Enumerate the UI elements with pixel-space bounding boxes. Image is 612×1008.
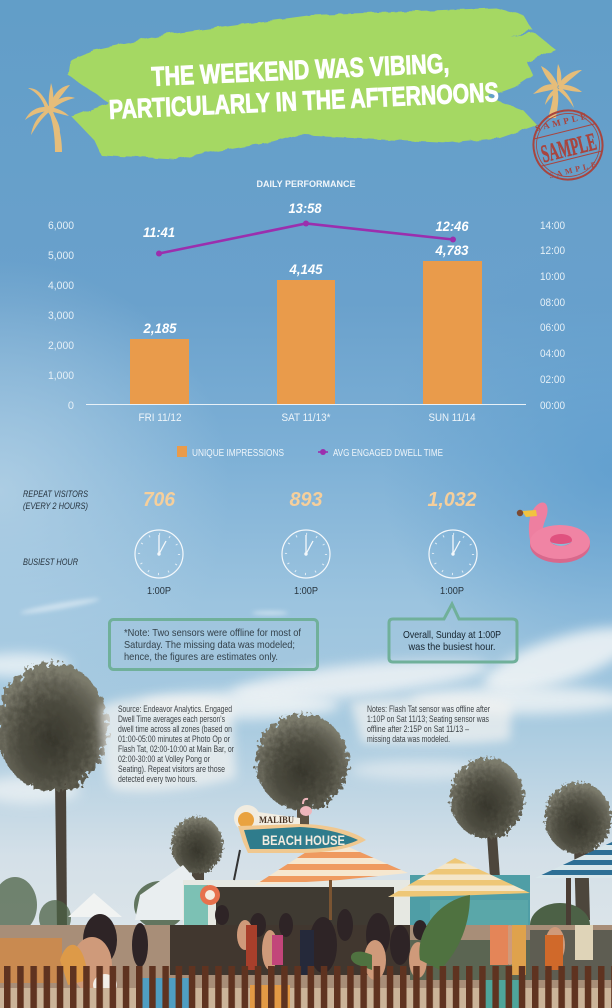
title: THE WEEKEND WAS VIBING, [151,48,450,92]
palm tree small [171,816,223,885]
row labels: REPEAT VISITORS [23,489,89,500]
right axis labels: 04:00 [540,348,565,360]
blue striped umbrella [535,842,612,928]
right axis labels: 12:00 [540,245,565,257]
source text: dwell time across all zones (based on [118,724,232,734]
sign: Malibu Beach House: MALIBU [259,816,294,826]
line: avg engaged dwell time [156,220,456,256]
right axis labels: 06:00 [540,322,565,334]
notes text: Notes: Flash Tat sensor was offline after [367,704,490,714]
clock time labels [147,585,464,597]
photo: beach house scene [0,663,612,1008]
callout: busiest hour: was the busiest hour. [408,641,496,653]
repeat visitor figures: 1,032 [428,489,476,511]
category labels [138,412,476,424]
notes text: offline after 2:15P on Sat 11/13 – [367,724,470,734]
bars: unique impressions [130,261,482,404]
right axis labels: 00:00 [540,400,565,412]
source text: Seating). Repeat visitors are those [118,764,225,774]
icon: palm tree left [25,83,75,152]
title brush stroke [68,8,556,159]
left axis labels: 3,000 [48,310,74,322]
source text: 01:00-05:00 minutes at Photo Op or [118,734,230,744]
category labels: SUN 11/14 [428,412,476,424]
left axis labels: 2,000 [48,340,74,352]
left axis labels: 5,000 [48,250,74,262]
note box: hence, the figures are estimates only. [124,651,278,663]
right axis labels: 14:00 [540,220,565,232]
data labels: 11:41 [143,224,175,240]
clock time labels: 1:00P [294,585,318,597]
callout: busiest hour [389,604,517,662]
row labels [23,489,89,568]
callout: busiest hour: Overall, Sunday at 1:00P [403,629,501,641]
notes text [367,704,490,744]
notes text: missing data was modeled. [367,734,450,744]
note box: *Note: Two sensors were offline for most of [124,627,301,639]
crowd [0,895,612,1008]
palm tree right [450,758,524,878]
repeat visitor figures [143,489,476,511]
icon: palm tree right [533,64,582,118]
background foliage [0,877,590,947]
row labels: (EVERY 2 HOURS) [23,501,88,512]
notes background blob [350,697,512,744]
data labels: 4,783 [435,242,469,258]
data labels: 2,185 [143,320,177,336]
category labels: SAT 11/13* [282,412,331,424]
left axis labels [48,220,74,412]
white tents [68,865,204,920]
orange striped umbrella [255,838,408,920]
legend: AVG ENGAGED DWELL TIME [333,447,443,459]
title: PARTICULARLY IN THE AFTERNOONS [108,77,499,125]
repeat visitor figures: 893 [290,489,322,511]
notes text: 1:10P on Sat 11/13; Seating sensor was [367,714,489,724]
right axis labels [540,220,565,412]
note box: Saturday. The missing data was modeled; [124,639,295,651]
clock: Friday [135,530,183,578]
sign: Malibu Beach House [234,799,366,880]
icon: flamingo float [517,502,590,563]
clock time labels: 1:00P [440,585,464,597]
left axis labels: 6,000 [48,220,74,232]
stamp: sample: SAMPLE [548,159,600,180]
sign: Malibu Beach House: BEACH HOUSE [262,832,345,848]
right axis labels: 02:00 [540,374,565,386]
right axis labels: 08:00 [540,297,565,309]
yellow striped umbrella [388,858,530,897]
chart heading: DAILY PERFORMANCE [256,179,356,189]
category labels: FRI 11/12 [138,412,182,424]
clock: Sunday [429,530,477,578]
source text: Dwell Time averages each person's [118,714,225,724]
source text [118,704,234,784]
data labels [143,200,469,336]
source note background blob [100,696,236,792]
palm tree centre [256,714,348,830]
left axis labels: 4,000 [48,280,74,292]
beach house building [183,875,530,965]
left axis labels: 0 [68,400,74,412]
source text: 02:00-30:00 at Volley Pong or [118,754,210,764]
source text: Flash Tat, 02:00-10:00 at Main Bar, or [118,744,234,754]
palm tree far right [545,782,611,920]
clock: Saturday [282,530,330,578]
source text: Source: Endeavor Analytics. Engaged [118,704,232,714]
row labels: BUSIEST HOUR [23,557,78,568]
legend: UNIQUE IMPRESSIONS [192,447,284,459]
title [107,46,499,125]
note box [110,620,318,670]
legend [177,446,443,459]
clock time labels: 1:00P [147,585,171,597]
combo chart: daily performance [48,200,565,424]
data labels: 12:46 [436,218,469,234]
right axis labels: 10:00 [540,271,565,283]
ground and fence [0,966,612,1008]
stamp: sample [526,103,610,187]
repeat visitor figures: 706 [143,489,176,511]
source text: detected every two hours. [118,774,197,784]
palm tree far left [0,663,107,930]
data labels: 13:58 [288,200,322,216]
left axis labels: 1,000 [48,370,74,382]
stamp: sample: SAMPLE [534,110,590,133]
data labels: 4,145 [289,261,323,277]
